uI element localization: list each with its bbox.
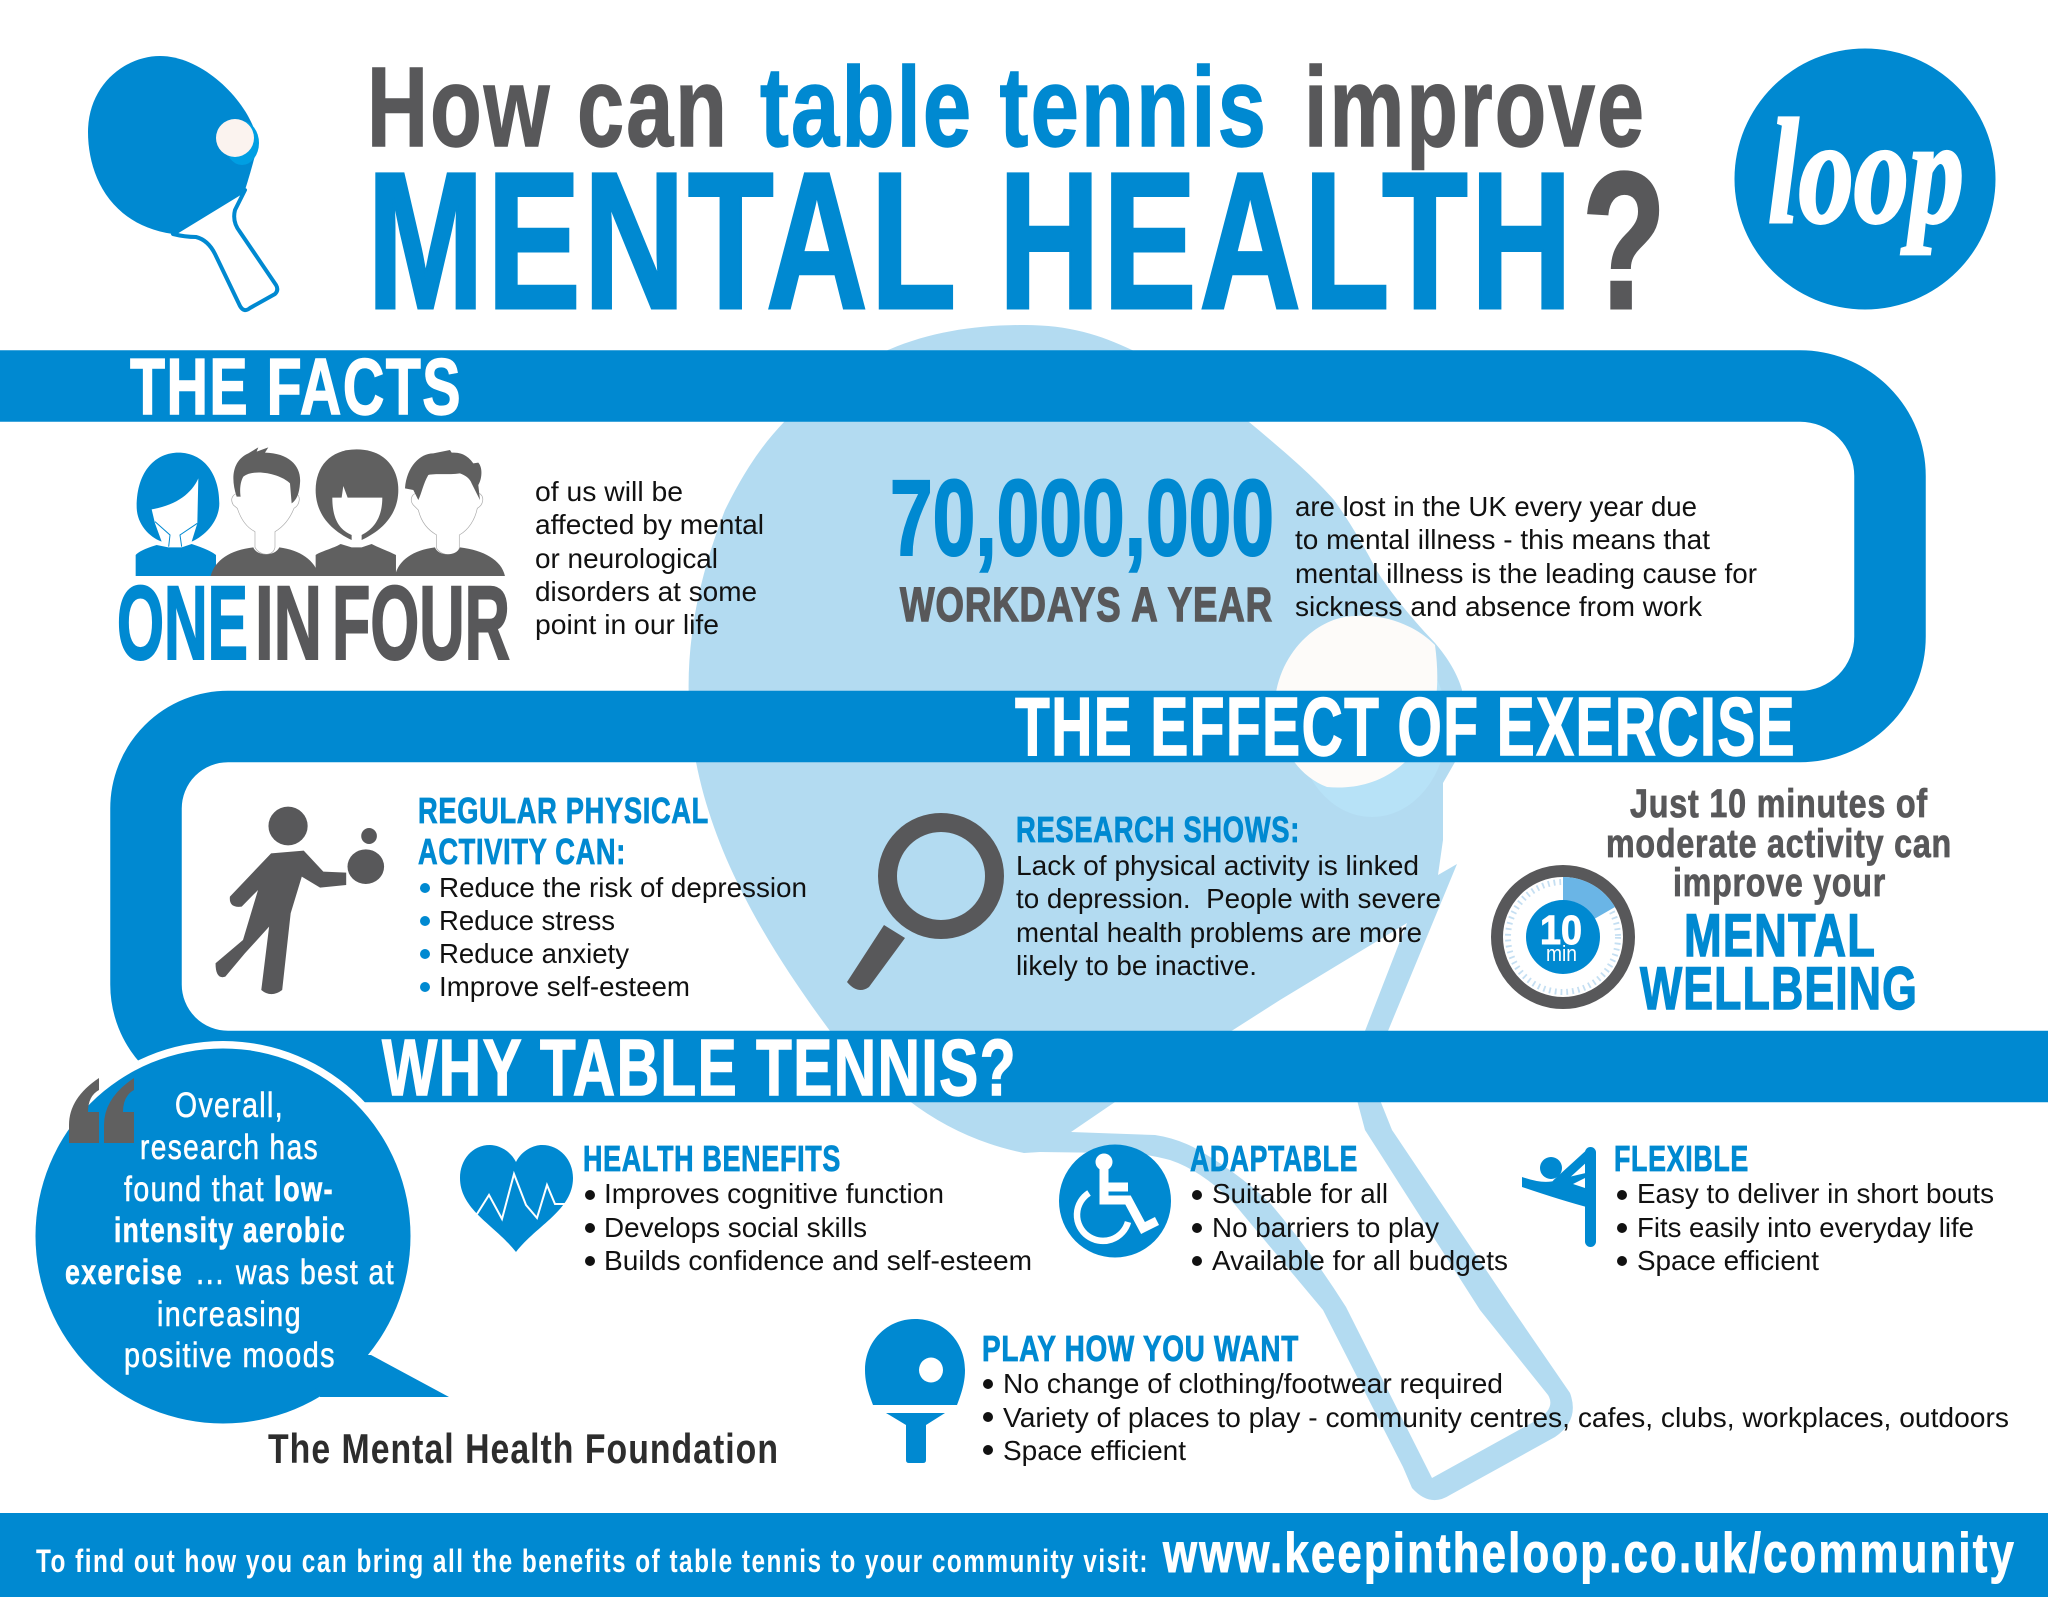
text: adaptable bbox=[1190, 1138, 1508, 1276]
footer band: To find out how you can bring all the benefits of table tennis to your community visit: bbox=[36, 1543, 1149, 1579]
heading: the facts: THE FACTS bbox=[130, 342, 462, 431]
text: health benefits: HEALTH BENEFITS bbox=[583, 1138, 841, 1179]
text: ten minutes of moderate activity: MENTAL bbox=[1684, 902, 1876, 969]
text: flexible: Fits easily into everyday life bbox=[1637, 1212, 1974, 1243]
person: woman in blue bbox=[136, 453, 219, 576]
icon: magnifying glass bbox=[847, 822, 994, 990]
text: workdays description: to mental illness - this means that bbox=[1295, 524, 1710, 555]
quote text bbox=[65, 1086, 395, 1375]
person: man with spiky hair bbox=[211, 447, 319, 576]
text: regular physical activity: Reduce the risk of depression bbox=[439, 872, 807, 903]
quote text: positive moods bbox=[124, 1336, 336, 1375]
text: play how you want: Variety of places to play - community centres, cafes, clubs, workplaces, outdoors bbox=[1003, 1402, 2009, 1433]
ribbon: winding blue band bbox=[0, 386, 2048, 1066]
text: workdays description: are lost in the UK every year due bbox=[1295, 491, 1697, 522]
heading: why table tennis: WHY TABLE TENNIS? bbox=[382, 1023, 1017, 1112]
text: regular physical activity: REGULAR PHYSICAL bbox=[418, 790, 709, 831]
text: flexible: Space efficient bbox=[1637, 1245, 1819, 1276]
text: one in four description: affected by mental bbox=[535, 509, 764, 540]
text: research shows bbox=[1016, 809, 1441, 981]
quote text: was best at bbox=[235, 1253, 395, 1292]
title: ? bbox=[1582, 132, 1666, 350]
text: flexible: Easy to deliver in short bouts bbox=[1637, 1178, 1994, 1209]
text: health benefits bbox=[583, 1138, 1032, 1276]
text: workdays description bbox=[1295, 491, 1757, 622]
person: woman with bob bbox=[316, 449, 398, 576]
text: adaptable: Available for all budgets bbox=[1212, 1245, 1508, 1276]
quote text: exercise bbox=[65, 1253, 183, 1292]
text: one in four description bbox=[535, 476, 764, 640]
stat: one in four: FOUR bbox=[332, 565, 510, 682]
text: flexible: FLEXIBLE bbox=[1614, 1138, 1749, 1179]
icon: ten minute timer bbox=[1497, 871, 1629, 1003]
stat: one in four bbox=[117, 565, 510, 682]
text: ten minutes of moderate activity: moderate activity can bbox=[1606, 822, 1952, 866]
text: play how you want bbox=[982, 1328, 2009, 1466]
logo: loop: loop bbox=[1768, 89, 1964, 255]
text: research shows: likely to be inactive. bbox=[1016, 950, 1257, 981]
icon: flexible stretching figure bbox=[1522, 1147, 1596, 1247]
text: ten minutes of moderate activity: WELLBEING bbox=[1640, 955, 1918, 1022]
text: one in four description: or neurological bbox=[535, 543, 718, 574]
quote text: low- bbox=[274, 1170, 334, 1209]
text: ten minutes of moderate activity: improve your bbox=[1673, 861, 1886, 905]
quote text: research has bbox=[140, 1128, 319, 1167]
icon: heart with pulse bbox=[460, 1145, 573, 1252]
quote text: Overall, bbox=[175, 1086, 284, 1125]
text: health benefits: Improves cognitive function bbox=[604, 1178, 944, 1209]
text: regular physical activity bbox=[418, 790, 807, 1002]
text: regular physical activity: Reduce anxiety bbox=[439, 938, 629, 969]
text: research shows: mental health problems are more bbox=[1016, 917, 1422, 948]
text: health benefits: Builds confidence and self-esteem bbox=[604, 1245, 1032, 1276]
text: one in four description: of us will be bbox=[535, 476, 683, 507]
text: adaptable: Suitable for all bbox=[1212, 1178, 1388, 1209]
text: play how you want: No change of clothing/footwear required bbox=[1003, 1368, 1503, 1399]
text: flexible bbox=[1614, 1138, 1994, 1276]
icon: table tennis player bbox=[216, 807, 384, 994]
text: adaptable: No barriers to play bbox=[1212, 1212, 1439, 1243]
icon: ten minute timer: 10 bbox=[1540, 907, 1582, 953]
stat: 70,000,000 workdays a year: WORKDAYS A YEAR bbox=[900, 579, 1273, 632]
quote text: intensity aerobic bbox=[114, 1211, 346, 1250]
text: regular physical activity: Improve self-esteem bbox=[439, 971, 690, 1002]
quote bubble bbox=[28, 1041, 449, 1431]
title: table tennis bbox=[760, 44, 1268, 170]
stat: one in four: ONE bbox=[117, 565, 248, 682]
stat: 70,000,000 workdays a year: 70,000,000 bbox=[890, 457, 1274, 578]
text: regular physical activity: Reduce stress bbox=[439, 905, 615, 936]
icon: table tennis bat with ball bbox=[88, 56, 277, 310]
text: workdays description: sickness and absence from work bbox=[1295, 591, 1703, 622]
title bbox=[367, 44, 1666, 350]
text: play how you want: Space efficient bbox=[1003, 1435, 1186, 1466]
title: improve bbox=[1304, 44, 1646, 170]
text: health benefits: Develops social skills bbox=[604, 1212, 867, 1243]
logo: loop bbox=[1734, 48, 1996, 310]
text: one in four description: point in our life bbox=[535, 609, 719, 640]
icon: ten minute timer: min bbox=[1546, 941, 1577, 966]
background table tennis bat watermark bbox=[689, 325, 1573, 1500]
icon: quotation mark bbox=[69, 1078, 134, 1143]
attribution: The Mental Health Foundation bbox=[268, 1425, 779, 1472]
text: adaptable: ADAPTABLE bbox=[1190, 1138, 1358, 1179]
stat: one in four: IN bbox=[255, 565, 322, 682]
text: research shows: to depression. People with severe bbox=[1016, 883, 1441, 914]
footer band bbox=[0, 1513, 2048, 1597]
stat: 70,000,000 workdays a year bbox=[890, 457, 1274, 632]
text: workdays description: mental illness is the leading cause for bbox=[1295, 558, 1757, 589]
quote text: increasing bbox=[157, 1295, 302, 1334]
text: research shows: RESEARCH SHOWS: bbox=[1016, 809, 1300, 850]
icon: four people bbox=[136, 447, 505, 576]
title: MENTAL HEALTH bbox=[367, 132, 1575, 350]
person: man with quiff bbox=[395, 450, 505, 576]
title: How can bbox=[367, 44, 729, 170]
icon: wheelchair bbox=[1059, 1144, 1171, 1258]
text: play how you want: PLAY HOW YOU WANT bbox=[982, 1328, 1299, 1369]
text: research shows: Lack of physical activity is linked bbox=[1016, 850, 1419, 881]
quote text: ... bbox=[196, 1253, 225, 1292]
text: one in four description: disorders at some bbox=[535, 576, 757, 607]
text: ten minutes of moderate activity: Just 10 minutes of bbox=[1630, 782, 1928, 826]
text: ten minutes of moderate activity bbox=[1606, 782, 1952, 1022]
text: regular physical activity: ACTIVITY CAN: bbox=[418, 831, 626, 872]
quote text: found that bbox=[124, 1170, 265, 1209]
icon: table tennis bat bbox=[865, 1319, 965, 1463]
